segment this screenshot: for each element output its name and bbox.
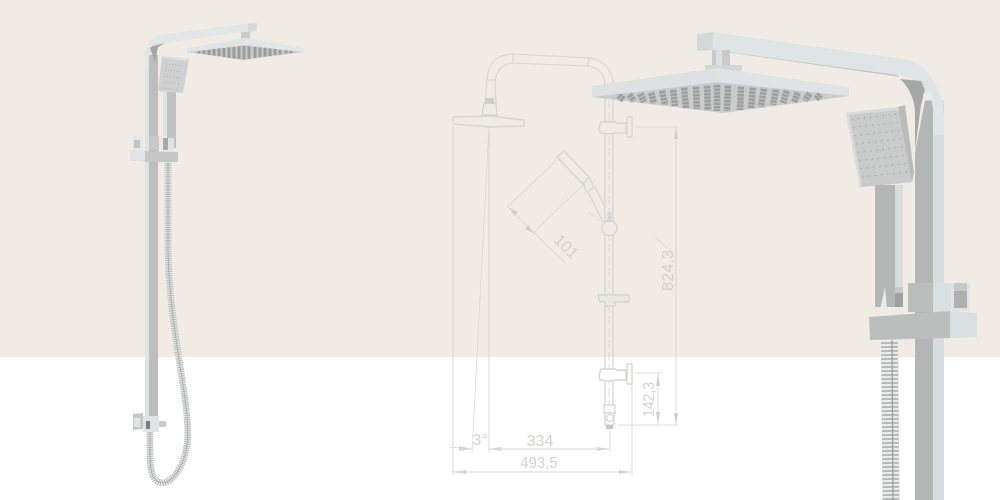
ball joint [602, 212, 617, 236]
close-up rain head [592, 68, 849, 113]
close-up riser column [915, 100, 944, 500]
beige background band [0, 0, 1000, 357]
bottom fitting [604, 405, 615, 429]
close-up bracket [869, 283, 977, 340]
close-up hose [890, 340, 893, 500]
fixed head outline [453, 98, 524, 127]
nozzle rows [618, 84, 821, 111]
hose [150, 162, 188, 483]
dimension: 824,3 [617, 127, 679, 425]
dimension: 334: 334 [527, 433, 553, 450]
lower wall arm outline [599, 364, 632, 384]
hand shower outline [557, 151, 605, 223]
product close-up: rain head and riser [592, 32, 977, 500]
shower arm [145, 23, 257, 70]
product view: full shower set [130, 23, 304, 483]
dimension: 142,3 [635, 373, 662, 425]
dimension: 3 degrees: 3° [472, 432, 488, 449]
rain head [187, 38, 304, 60]
upper bracket [130, 136, 178, 162]
upper wall arm outline [599, 117, 632, 137]
spray dots [851, 114, 908, 177]
close-up shower arm [697, 32, 944, 150]
hand shower [158, 56, 189, 148]
close-up head mount [705, 50, 742, 71]
close-up hand shower head [846, 105, 914, 187]
dimension: 334 [489, 126, 610, 452]
dimension: 493,5 [453, 126, 632, 475]
technical dimension drawing [449, 54, 679, 475]
close-up handle [875, 185, 903, 307]
lower wall bracket [133, 413, 166, 432]
dimension: 142,3: 142,3 [641, 382, 658, 417]
slider outline [598, 295, 629, 306]
dimension: 3 degrees [449, 126, 489, 452]
dimension: 493,5: 493,5 [520, 455, 558, 472]
riser outline [605, 84, 613, 405]
dimension: 101 [507, 160, 583, 263]
dimension: 101: 101 [550, 232, 581, 263]
dimension: 824,3: 824,3 [660, 250, 677, 291]
overhead arm outline [485, 54, 613, 103]
riser column [145, 50, 158, 418]
